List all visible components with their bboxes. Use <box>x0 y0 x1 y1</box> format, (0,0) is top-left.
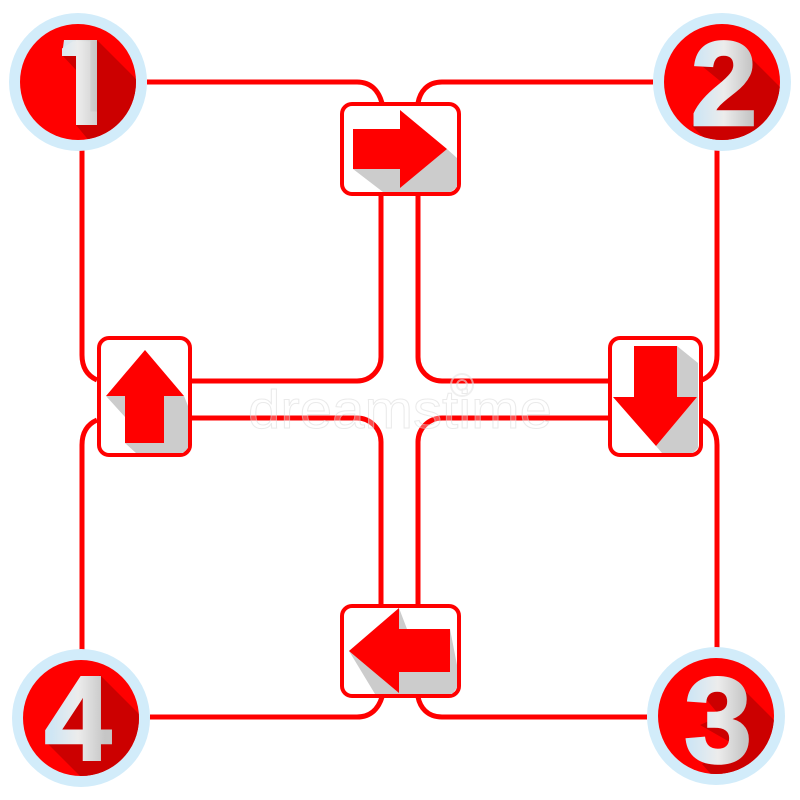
connector: bottom-left loop <box>82 418 382 717</box>
badge 1 <box>9 13 147 151</box>
arrow shadow: up arrow <box>106 396 188 453</box>
numeral 3: 3 <box>684 652 752 788</box>
long shadow 1 <box>63 40 136 140</box>
numeral 1: 1 <box>45 17 111 151</box>
numeral 4: 4 <box>45 652 112 786</box>
badge 3 <box>647 647 785 785</box>
connector: bottom-right loop <box>418 418 717 717</box>
numeral 2: 2 <box>691 17 757 151</box>
long shadow 3 <box>700 692 774 774</box>
badge 4 <box>12 649 150 787</box>
box: top right-pointing arrow <box>342 104 459 194</box>
long shadow 2 <box>692 56 780 140</box>
arrow: right <box>353 110 447 188</box>
numeral 1 <box>62 40 97 125</box>
box: right down-pointing arrow <box>610 338 701 455</box>
arrow: left <box>349 608 450 693</box>
watermark: dreamstime <box>248 380 552 440</box>
badge 2 <box>653 13 791 151</box>
arrow: down <box>613 346 697 446</box>
connector: top-left loop <box>82 82 382 381</box>
arrow: up <box>106 350 184 443</box>
box: bottom left-pointing arrow <box>342 606 459 696</box>
long shadow 4 <box>48 675 139 776</box>
arrow shadow: left arrow <box>349 608 457 694</box>
connector: top-right loop <box>418 82 717 381</box>
box: left up-pointing arrow <box>99 338 190 455</box>
arrow shadow: right arrow <box>353 149 457 192</box>
arrow shadow: down arrow <box>656 346 698 453</box>
